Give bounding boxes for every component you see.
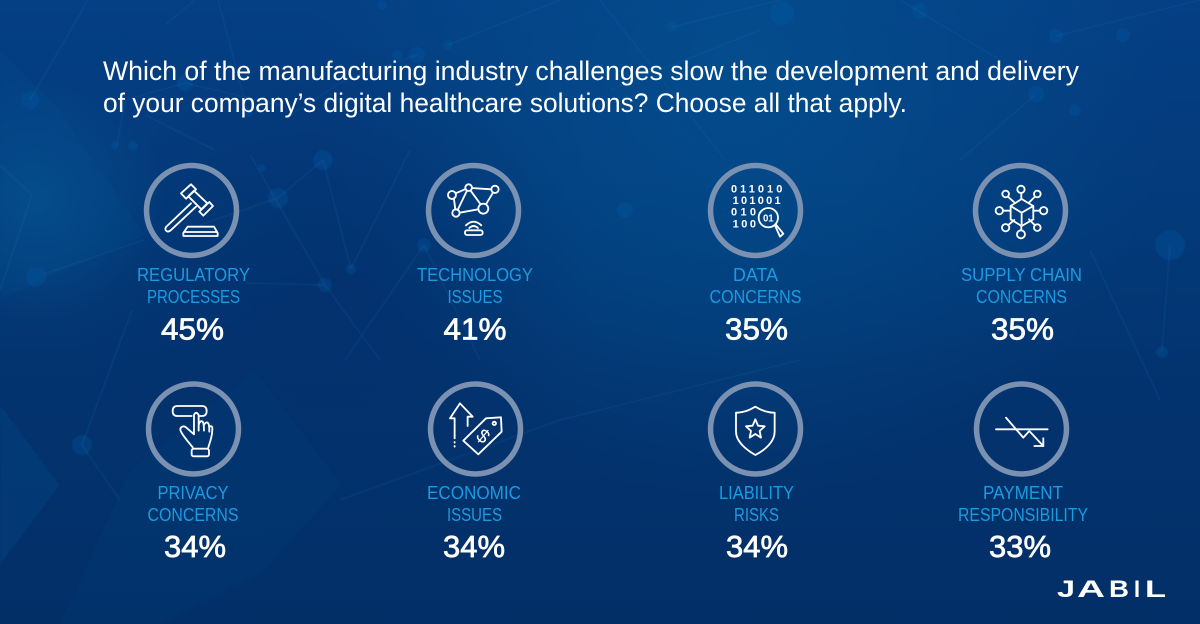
icon: falling trend line xyxy=(976,384,1066,474)
icon: binary data with magnifier: 01 xyxy=(763,213,774,224)
label xyxy=(710,265,802,307)
label xyxy=(958,483,1088,525)
title: Which of the manufacturing industry challenges slow the development and delivery xyxy=(103,56,1080,86)
icon: gavel xyxy=(146,166,236,256)
label xyxy=(719,483,794,525)
icon: network xyxy=(428,166,518,256)
value: 35% xyxy=(725,312,788,346)
icon: price tag and up arrow: $ xyxy=(472,425,494,449)
logo: Jabil: L xyxy=(1145,576,1166,603)
icon: binary data with magnifier: 100 xyxy=(733,219,756,231)
label xyxy=(137,265,250,307)
icon: hand pressing button xyxy=(148,384,238,474)
icon: binary data with magnifier xyxy=(710,166,800,256)
logo: Jabil xyxy=(1057,576,1166,603)
logo: Jabil: J xyxy=(1057,576,1075,603)
icon: binary data with magnifier: 010 xyxy=(731,207,756,219)
label: SUPPLY CHAIN xyxy=(961,265,1082,285)
icon: price tag and up arrow xyxy=(430,384,520,474)
label xyxy=(417,265,533,307)
value: 35% xyxy=(991,312,1054,346)
label: DATA xyxy=(733,265,778,285)
icon: shield with star xyxy=(710,384,800,474)
label: ISSUES xyxy=(447,505,502,525)
label: LIABILITY xyxy=(719,483,794,503)
value: 34% xyxy=(443,529,505,564)
label xyxy=(427,483,521,525)
label: CONCERNS xyxy=(976,287,1067,307)
value: 34% xyxy=(164,529,226,564)
title xyxy=(103,56,1080,118)
label: PRIVACY xyxy=(158,483,228,503)
item: regulatory processes xyxy=(137,166,250,346)
label: TECHNOLOGY xyxy=(417,265,533,285)
item: technology issues xyxy=(417,166,533,346)
label xyxy=(961,265,1082,307)
logo: Jabil: B xyxy=(1109,576,1129,603)
icon: cube hub xyxy=(976,166,1066,256)
title: of your company’s digital healthcare solutions? Choose all that apply. xyxy=(103,88,907,118)
icon: binary data with magnifier: 101001 xyxy=(733,195,781,207)
label: ISSUES xyxy=(448,287,502,307)
label xyxy=(148,483,238,525)
icon: binary data with magnifier: 011010 xyxy=(731,183,782,195)
item: data concerns xyxy=(710,166,802,346)
logo: Jabil: I xyxy=(1134,576,1140,603)
item: liability risks xyxy=(710,384,800,564)
label: CONCERNS xyxy=(148,505,238,525)
label: CONCERNS xyxy=(710,287,802,307)
logo: Jabil: A xyxy=(1077,576,1105,603)
label: RESPONSIBILITY xyxy=(958,505,1088,525)
label: ECONOMIC xyxy=(427,483,521,503)
label: PROCESSES xyxy=(147,287,240,307)
value: 41% xyxy=(444,312,506,346)
item: economic issues xyxy=(427,384,521,564)
label: REGULATORY xyxy=(137,265,250,285)
label: PAYMENT xyxy=(983,483,1063,503)
value: 45% xyxy=(161,312,224,346)
item: payment responsibility xyxy=(958,384,1088,564)
item: supply chain concerns xyxy=(961,166,1082,346)
label: RISKS xyxy=(734,505,779,525)
value: 33% xyxy=(989,529,1051,564)
item: privacy concerns xyxy=(148,384,238,564)
value: 34% xyxy=(726,529,788,564)
